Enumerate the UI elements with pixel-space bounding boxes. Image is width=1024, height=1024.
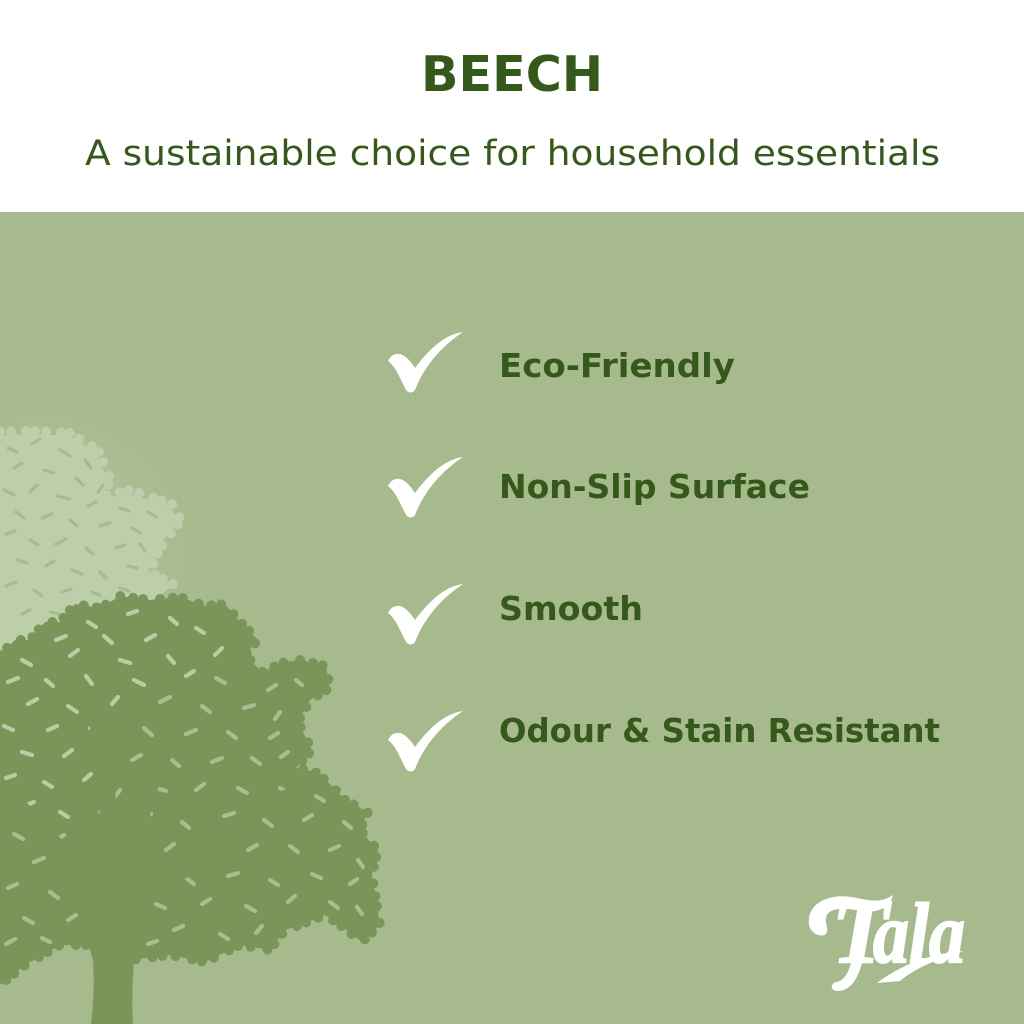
leaf edge [0,596,380,985]
icon: check mark 3 [388,584,463,644]
label: smooth: Smooth [499,589,643,628]
gaps between leaves, upper left [4,611,222,817]
logo: Tala [809,880,965,991]
subtitle: A sustainable choice for household essentials [85,134,940,174]
label: odour and stain resistant: Odour & Stain Resistant [499,711,940,750]
logo: Tala: T [832,880,892,982]
tree crown [0,596,380,985]
label: non-slip surface: Non-Slip Surface [499,467,810,506]
logo: Tala: ala [873,885,965,981]
icon: check mark 2 [388,457,463,517]
gaps between leaves, lower right [6,678,363,944]
label: eco-friendly: Eco-Friendly [499,346,735,385]
illustration: dark foreground beech tree [0,596,380,1024]
icon: check mark 4 [388,711,463,771]
illustration: pale background tree [0,400,260,690]
trunk and branches [10,660,290,1024]
title: BEECH [421,46,603,103]
icon: check mark 1 [388,332,463,392]
panel: green background [0,212,1024,1024]
